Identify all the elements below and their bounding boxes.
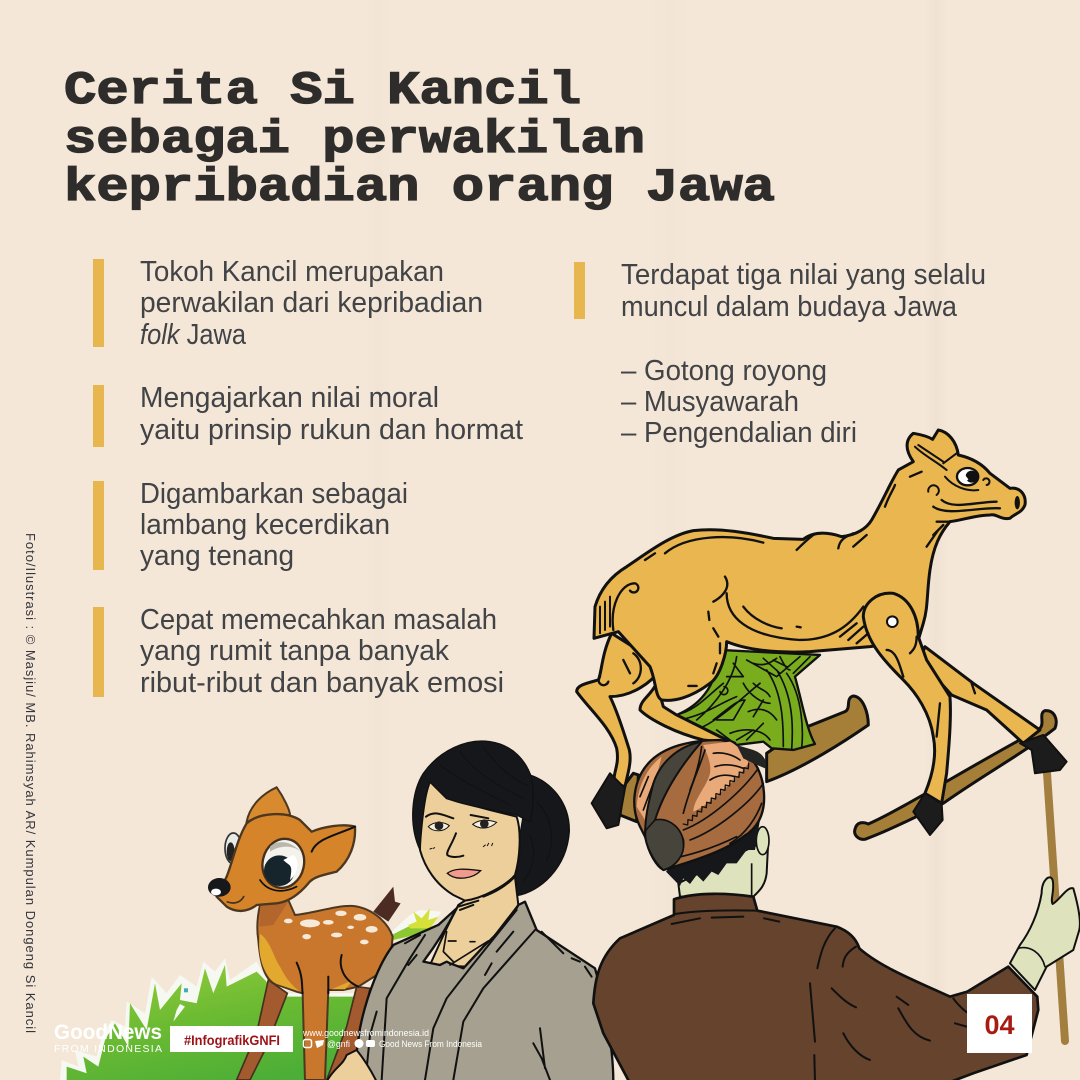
- turban cloth: [645, 742, 702, 870]
- point: Tokoh Kancil: folk Jawa: [140, 319, 246, 351]
- point: Tokoh Kancil: Tokoh Kancil merupakan: [140, 256, 444, 288]
- point: tiga nilai: muncul dalam budaya Jawa: [621, 291, 957, 323]
- neck: [678, 840, 768, 897]
- point: tiga nilai: [574, 259, 986, 323]
- face: [420, 782, 520, 901]
- point: nilai moral: yaitu prinsip rukun dan hormat: [140, 414, 523, 446]
- body detail lines: [599, 472, 1000, 737]
- point: lambang kecerdikan: Digambarkan sebagai: [140, 478, 408, 510]
- blouse: [357, 902, 613, 1080]
- point: tiga nilai: Terdapat tiga nilai yang selalu: [621, 259, 986, 291]
- social links: www.goodnewsfromindonesia.id: [302, 1028, 429, 1038]
- list: tiga nilai: [621, 355, 857, 449]
- photo credit: Foto/Ilustrasi : © Masjiu/ MB. Rahimsyah AR/ Kumpulan Dongeng Si Kancil: [23, 533, 38, 1033]
- grass tuft: [392, 908, 442, 940]
- title: kepribadian orang Jawa: [64, 162, 775, 214]
- hashtag badge: [170, 1026, 293, 1052]
- hooves: [1020, 735, 1067, 773]
- point: lambang kecerdikan: [93, 478, 408, 572]
- near hind foot: [640, 683, 735, 743]
- point: Tokoh Kancil: [93, 256, 483, 351]
- list: tiga nilai: – Musyawarah: [621, 386, 799, 418]
- logo: GoodNews From Indonesia: FROM INDONESIA: [54, 1043, 162, 1055]
- turban: [634, 740, 766, 870]
- shadow puppet stick: [1047, 773, 1065, 1041]
- title: sebagai perwakilan: [64, 114, 645, 166]
- hair front: [413, 741, 533, 850]
- point: lambang kecerdikan: lambang kecerdikan: [140, 509, 390, 541]
- far hind leg: [577, 633, 657, 787]
- point: lambang kecerdikan: yang tenang: [140, 540, 294, 572]
- point: memecahkan masalah: Cepat memecahkan masalah: [140, 604, 497, 636]
- title: Cerita Si Kancil: [64, 65, 581, 117]
- woman: [327, 741, 613, 1080]
- man with turban: [593, 740, 1080, 1080]
- facial features: [426, 813, 513, 910]
- wayang deer: [577, 430, 1067, 839]
- title: [64, 65, 775, 214]
- point: memecahkan masalah: yang rumit tanpa banyak: [140, 635, 450, 667]
- social links: [302, 1028, 482, 1049]
- fawn: [208, 787, 401, 1080]
- eye: [957, 468, 978, 485]
- logo: GoodNews From Indonesia: GoodNews: [54, 1021, 162, 1044]
- point: nilai moral: [93, 382, 523, 447]
- list: tiga nilai: – Gotong royong: [621, 355, 827, 387]
- body and head: [594, 430, 1025, 700]
- hashtag badge: #InfografikGNFI: [184, 1032, 280, 1048]
- page number: 04: [984, 1010, 1015, 1040]
- point: nilai moral: Mengajarkan nilai moral: [140, 382, 439, 414]
- social links: @gnfi: [327, 1039, 350, 1049]
- page number: [967, 994, 1032, 1053]
- far foreleg: [920, 647, 1040, 743]
- hand: [327, 1050, 377, 1080]
- point: memecahkan masalah: [93, 604, 504, 699]
- jacket: [593, 894, 1038, 1080]
- point: Tokoh Kancil: perwakilan dari kepribadian: [140, 287, 483, 319]
- neck: [430, 877, 518, 967]
- list: tiga nilai: – Pengendalian diri: [621, 417, 857, 449]
- grass: [60, 958, 393, 1080]
- social links: Good News From Indonesia: [379, 1039, 482, 1049]
- near foreleg: [863, 593, 950, 803]
- hair back: [513, 775, 569, 896]
- point: memecahkan masalah: ribut-ribut dan banyak emosi: [140, 667, 504, 699]
- logo: GoodNews From Indonesia: [54, 1021, 162, 1055]
- handles: [767, 696, 868, 782]
- glove: [1010, 877, 1080, 990]
- skirt: [677, 650, 820, 750]
